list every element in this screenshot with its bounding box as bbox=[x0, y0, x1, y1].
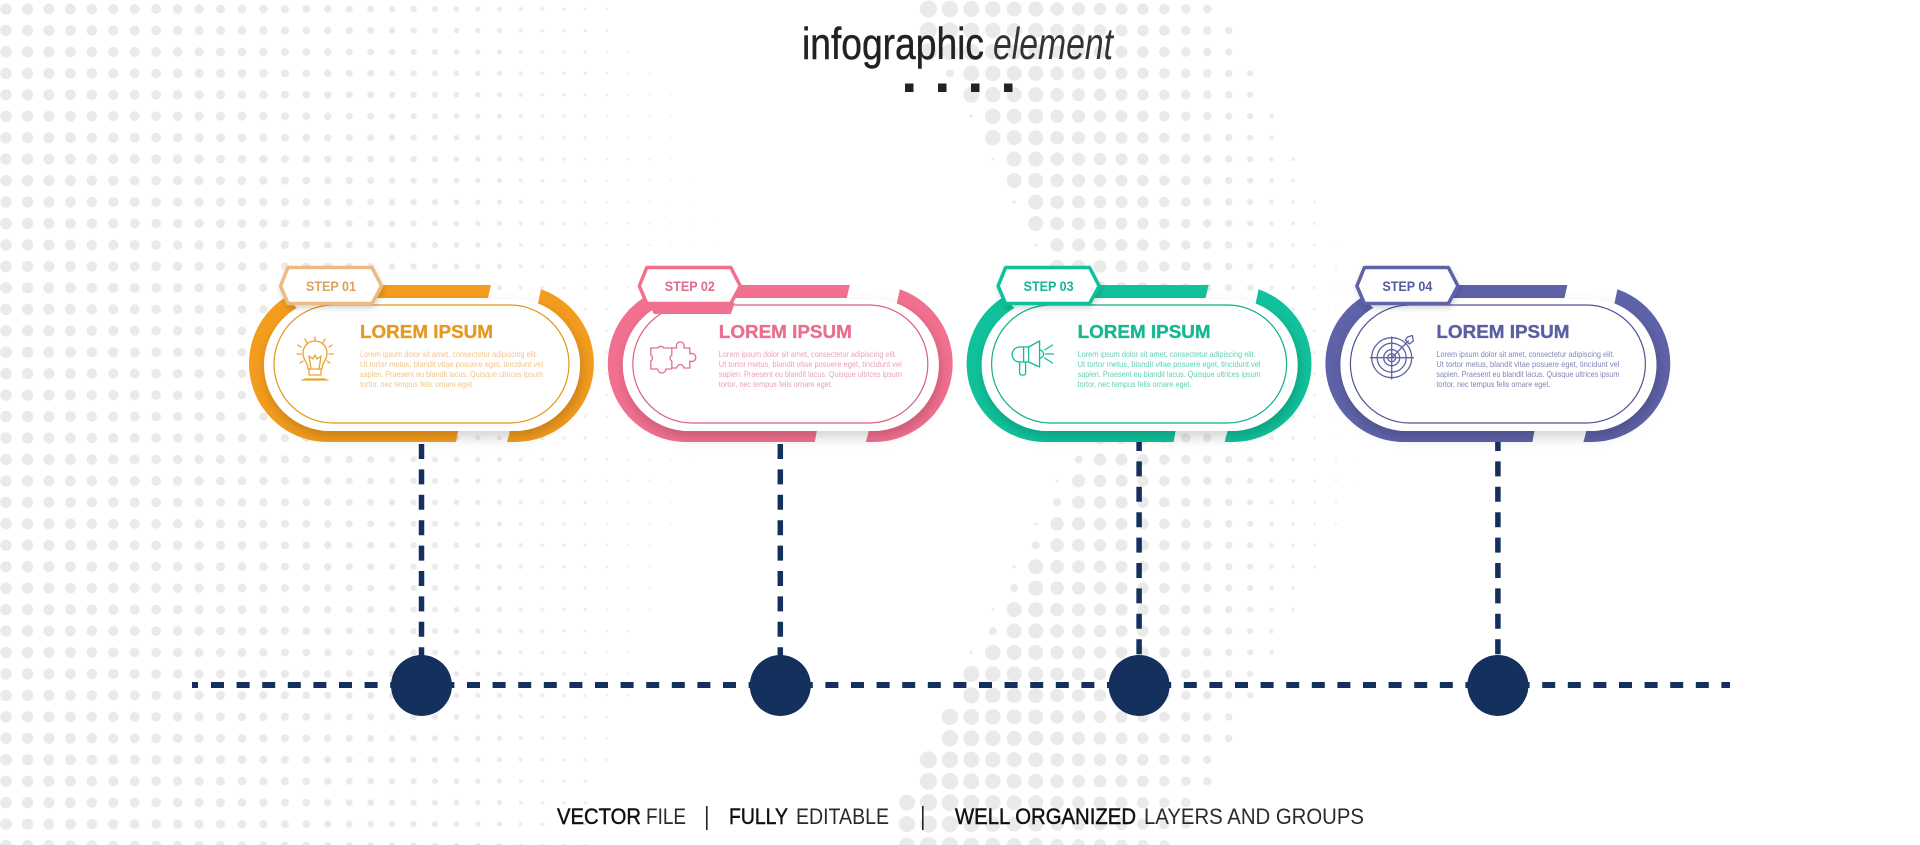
body text bbox=[719, 349, 902, 389]
footer caption bbox=[557, 804, 1364, 830]
title dots bbox=[905, 84, 1012, 92]
panel: step 01 bbox=[249, 268, 594, 442]
title: element bbox=[993, 20, 1114, 69]
horizontal timeline bbox=[192, 682, 1730, 688]
node 1 bbox=[391, 655, 452, 716]
footer caption: VECTOR bbox=[557, 804, 641, 829]
icon: target bbox=[1370, 336, 1413, 379]
connector 4 bbox=[1495, 436, 1501, 660]
body text: sapien. Praesent eu blandit lacus. Quisque ultrices ipsum bbox=[1436, 369, 1619, 379]
connector 3 bbox=[1136, 436, 1142, 660]
step badge: STEP 03 bbox=[1024, 278, 1074, 294]
title bbox=[802, 20, 1114, 69]
body text: Ut tortor metus, blandit vitae posuere eget, tincidunt vel bbox=[1436, 359, 1620, 369]
footer caption: FULLY bbox=[729, 804, 788, 829]
step badge bbox=[280, 268, 382, 304]
body text: Lorem ipsum dolor sit amet, consectetur adipiscing elit. bbox=[360, 349, 538, 359]
footer caption: FILE bbox=[646, 804, 686, 829]
halftone dot background bbox=[6, 9, 1357, 845]
body text: tortor, nec tempus felis ornare eget. bbox=[1436, 379, 1550, 389]
node 4 bbox=[1467, 655, 1528, 716]
heading: LOREM IPSUM bbox=[360, 321, 493, 342]
body text: sapien. Praesent eu blandit lacus. Quisque ultrices ipsum bbox=[1078, 369, 1261, 379]
connector 2 bbox=[778, 444, 783, 660]
node 3 bbox=[1109, 655, 1170, 716]
body text: Ut tortor metus, blandit vitae posuere eget, tincidunt vel bbox=[719, 359, 902, 369]
panel: step 04 bbox=[1325, 268, 1670, 442]
body text: Lorem ipsum dolor sit amet, consectetur adipiscing elit. bbox=[1436, 349, 1614, 359]
body text: Lorem ipsum dolor sit amet, consectetur adipiscing elit. bbox=[719, 349, 897, 359]
icon: light bulb bbox=[297, 337, 333, 380]
footer caption: EDITABLE bbox=[796, 804, 889, 829]
footer caption: LAYERS AND GROUPS bbox=[1144, 804, 1364, 829]
connector 1 bbox=[419, 444, 424, 660]
heading: LOREM IPSUM bbox=[1436, 321, 1569, 342]
body text: sapien. Praesent eu blandit lacus. Quisque ultrices ipsum bbox=[360, 369, 543, 379]
step badge: STEP 01 bbox=[306, 278, 356, 294]
body text bbox=[1436, 349, 1620, 389]
heading: LOREM IPSUM bbox=[1078, 321, 1211, 342]
body text: tortor, nec tempus felis ornare eget. bbox=[360, 379, 474, 389]
body text bbox=[360, 349, 543, 389]
body text: Lorem ipsum dolor sit amet, consectetur adipiscing elit. bbox=[1078, 349, 1256, 359]
body text bbox=[1078, 349, 1261, 389]
body text: tortor, nec tempus felis ornare eget. bbox=[1078, 379, 1192, 389]
step badge: STEP 04 bbox=[1382, 278, 1433, 294]
node 2 bbox=[750, 655, 811, 716]
title: infographic bbox=[802, 20, 984, 69]
body text: Ut tortor metus, blandit vitae posuere eget, tincidunt vel bbox=[1078, 359, 1261, 369]
body text: sapien. Praesent eu blandit lacus. Quisque ultrices ipsum bbox=[719, 369, 902, 379]
step badge: STEP 02 bbox=[665, 278, 715, 294]
footer caption: WELL ORGANIZED bbox=[955, 804, 1136, 829]
icon: megaphone bbox=[1012, 341, 1054, 375]
panel: step 02 bbox=[608, 268, 953, 442]
step badge bbox=[1357, 268, 1458, 304]
body text: Ut tortor metus, blandit vitae posuere eget, tincidunt vel bbox=[360, 359, 543, 369]
panel: step 03 bbox=[967, 268, 1311, 442]
step badge bbox=[639, 268, 740, 304]
heading: LOREM IPSUM bbox=[719, 321, 852, 342]
step badge bbox=[998, 268, 1099, 304]
icon: puzzle bbox=[651, 342, 696, 373]
body text: tortor, nec tempus felis ornare eget. bbox=[719, 379, 833, 389]
